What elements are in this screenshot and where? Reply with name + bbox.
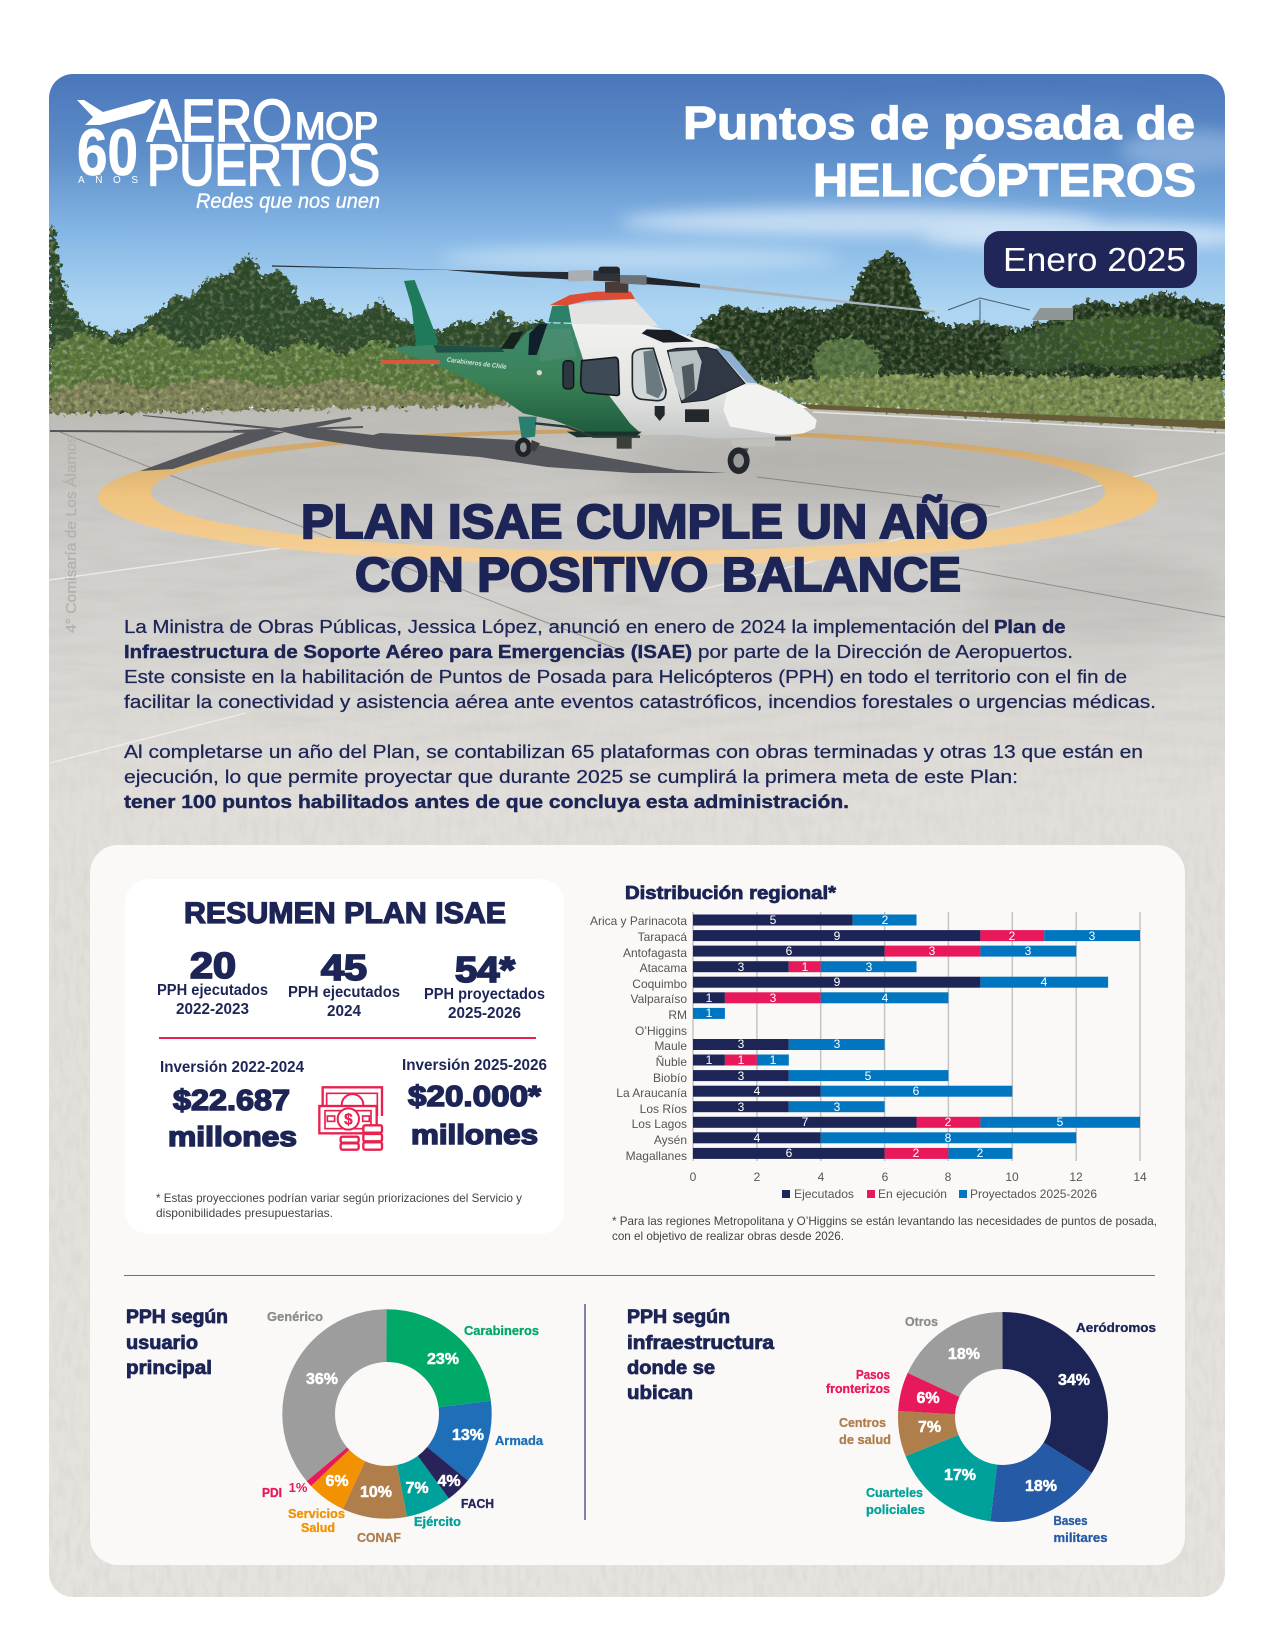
donut chart xyxy=(926,1340,1080,1494)
donut values: 6% xyxy=(916,1390,940,1407)
donut values: 17% xyxy=(944,1467,976,1484)
intro text: facilitar la conectividad y asistencia aérea ante eventos catastróficos, incendios forestales o urgencias médicas. xyxy=(124,691,1156,712)
inversión 2025-2026: Inversión 2025-2026 xyxy=(402,1057,547,1074)
footnote xyxy=(156,1191,522,1220)
stat 45: PPH ejecutados xyxy=(288,984,400,1001)
ground concrete xyxy=(49,403,1230,1597)
x axis: 12 xyxy=(1069,1170,1083,1184)
heading: donde se xyxy=(627,1358,715,1379)
donut labels: de salud xyxy=(839,1433,891,1447)
bar values: 5 xyxy=(1057,1115,1064,1129)
donut labels: CONAF xyxy=(357,1531,401,1545)
donut labels: Pasos xyxy=(856,1368,890,1382)
header title: Puntos de posada de xyxy=(683,97,1195,149)
donut labels: Aeródromos xyxy=(1076,1321,1156,1335)
donut labels: Bases xyxy=(1054,1514,1088,1528)
intro text: Plan de xyxy=(994,616,1066,637)
logo PUERTOS: PUERTOS xyxy=(147,133,380,198)
photo credit: 4° Comisaría de Los Álamos xyxy=(63,435,80,633)
icon: money: $ xyxy=(344,1112,353,1129)
años: AÑOS xyxy=(78,173,138,186)
bar chart: distribución regional xyxy=(590,882,1157,1243)
heading: ubican xyxy=(627,1383,693,1404)
stat 54: 2025-2026 xyxy=(448,1005,521,1022)
bar values: 3 xyxy=(834,1037,841,1051)
stat 45: 2024 xyxy=(327,1003,361,1020)
tail fin xyxy=(404,280,438,350)
bar values: 8 xyxy=(945,1131,952,1145)
bar values: 3 xyxy=(770,991,777,1005)
bar values: 2 xyxy=(882,913,889,927)
donut labels: Cuarteles xyxy=(866,1486,923,1500)
inversión 2025-2026 xyxy=(402,1057,547,1150)
intro text: ejecución, lo que permite proyectar que durante 2025 se cumplirá la primera meta de este Plan: xyxy=(124,766,1018,787)
heading xyxy=(126,1307,228,1379)
donut values xyxy=(289,1351,484,1501)
x axis: 14 xyxy=(1133,1170,1147,1184)
donut labels: Centros xyxy=(839,1416,886,1430)
stat 45: 45 xyxy=(321,947,367,988)
donut values: 6% xyxy=(325,1473,349,1490)
region labels: Antofagasta xyxy=(623,946,687,960)
bar values: 4 xyxy=(754,1131,761,1145)
intro text: por parte de la Dirección de Aeropuertos. xyxy=(698,641,1073,662)
donut values: 18% xyxy=(948,1346,980,1363)
bar values: 3 xyxy=(929,944,936,958)
legend: En ejecución xyxy=(878,1187,947,1201)
bar values: 4 xyxy=(754,1084,761,1098)
donut labels: policiales xyxy=(866,1503,925,1517)
stat 20 xyxy=(157,945,268,1018)
region labels: Coquimbo xyxy=(632,977,687,991)
bar values: 6 xyxy=(786,944,793,958)
donut labels: militares xyxy=(1054,1531,1108,1545)
icon: airplane xyxy=(77,99,156,125)
region labels xyxy=(590,914,687,1163)
heading: PPH según xyxy=(627,1307,730,1328)
bars xyxy=(693,914,1140,1159)
x axis: 2 xyxy=(754,1170,761,1184)
white body xyxy=(572,324,817,438)
region labels: Los Ríos xyxy=(640,1102,687,1116)
bar values: 1 xyxy=(706,1053,713,1067)
x axis: 10 xyxy=(1005,1170,1019,1184)
donut values: 7% xyxy=(918,1419,941,1436)
region labels: Aysén xyxy=(654,1133,687,1147)
bar values: 3 xyxy=(738,1100,745,1114)
legend: Proyectados 2025-2026 xyxy=(970,1187,1097,1201)
bar values: 1 xyxy=(802,960,809,974)
donut labels: Carabineros xyxy=(464,1324,539,1338)
bar values xyxy=(706,913,1096,1160)
bar values: 2 xyxy=(945,1115,952,1129)
stat 20: 20 xyxy=(190,945,236,986)
donut values: 1% xyxy=(289,1480,308,1495)
section: PPH según usuario principal xyxy=(126,1307,544,1545)
date badge: Enero 2025 xyxy=(1003,242,1186,279)
header title xyxy=(683,97,1196,206)
region labels: Arica y Parinacota xyxy=(590,914,687,928)
inversión 2022-2024: Inversión 2022-2024 xyxy=(160,1059,304,1076)
footnote: * Estas proyecciones podrían variar según priorizaciones del Servicio y xyxy=(156,1191,522,1205)
legend xyxy=(782,1187,1097,1201)
region labels: Los Lagos xyxy=(632,1117,687,1131)
heading: infraestructura xyxy=(627,1333,774,1354)
chart footnote xyxy=(612,1214,1157,1243)
region labels: RM xyxy=(668,1008,687,1022)
helicopter shadow xyxy=(50,415,727,473)
header title: HELICÓPTEROS xyxy=(813,154,1196,206)
inversión 2022-2024: millones xyxy=(168,1121,297,1152)
x axis: 6 xyxy=(882,1170,889,1184)
bar values: 3 xyxy=(738,1069,745,1083)
main title: PLAN ISAE CUMPLE UN AÑO xyxy=(301,494,988,549)
donut values: 13% xyxy=(452,1427,484,1444)
donut chart xyxy=(309,1336,465,1492)
logo MOP: MOP xyxy=(295,106,378,148)
bar values: 5 xyxy=(770,913,777,927)
stabilizer xyxy=(382,360,440,364)
bar values: 3 xyxy=(738,1037,745,1051)
donut labels: Servicios xyxy=(288,1507,345,1521)
stat 54: PPH proyectados xyxy=(424,986,545,1003)
date badge xyxy=(984,231,1197,288)
intro text: Este consiste en la habilitación de Puntos de Posada para Helicópteros (PPH) en todo el territorio con el fin de xyxy=(124,666,1127,687)
region labels: Atacama xyxy=(640,961,687,975)
cowling xyxy=(548,305,572,323)
main title xyxy=(301,494,988,602)
footnote: disponibilidades presupuestarias. xyxy=(156,1206,333,1220)
donut values xyxy=(916,1346,1090,1495)
heading: PPH según xyxy=(126,1307,228,1328)
trees left xyxy=(49,228,600,414)
rotor xyxy=(272,265,568,279)
inversión 2025-2026: millones xyxy=(411,1119,538,1150)
x axis xyxy=(690,1170,1147,1184)
intro text xyxy=(124,616,1156,812)
region labels: Magallanes xyxy=(626,1149,687,1163)
bar values: 6 xyxy=(913,1084,920,1098)
logo: Aeropuertos MOP 60 años xyxy=(77,88,380,213)
bar values: 5 xyxy=(865,1069,872,1083)
bar values: 1 xyxy=(770,1053,777,1067)
heading xyxy=(627,1307,774,1404)
logo AERO: AERO xyxy=(147,88,292,154)
donut labels: FACH xyxy=(461,1497,494,1511)
helicopter xyxy=(272,265,935,474)
main title: CON POSITIVO BALANCE xyxy=(355,549,961,602)
region labels: Valparaíso xyxy=(631,992,687,1006)
x axis: 8 xyxy=(945,1170,952,1184)
donut labels: fronterizos xyxy=(826,1382,890,1396)
donut values: 36% xyxy=(306,1371,338,1388)
heading: RESUMEN PLAN ISAE xyxy=(184,897,506,930)
region labels: Tarapacá xyxy=(638,930,687,944)
bar values: 1 xyxy=(738,1053,745,1067)
yellow helipad ring xyxy=(98,429,1158,565)
donut labels: Ejército xyxy=(414,1515,461,1529)
panel: resumen plan ISAE xyxy=(125,879,564,1234)
logo tagline: Redes que nos unen xyxy=(196,190,380,213)
donut values: 7% xyxy=(405,1480,429,1497)
intro text: Infraestructura de Soporte Aéreo para Emergencias (ISAE) xyxy=(124,641,692,662)
panel: data section xyxy=(90,845,1185,1565)
chart title: Distribución regional* xyxy=(625,882,837,903)
bar values: 1 xyxy=(706,1006,713,1020)
donut labels: PDI xyxy=(262,1486,282,1500)
belly and landing gear xyxy=(567,432,642,437)
region labels: Maule xyxy=(654,1039,687,1053)
fuselage green xyxy=(395,323,640,433)
stat 20: PPH ejecutados xyxy=(157,982,268,999)
region labels: La Araucanía xyxy=(616,1086,687,1100)
windows xyxy=(642,329,694,343)
bar values: 3 xyxy=(834,1100,841,1114)
bar values: 3 xyxy=(866,960,873,974)
bar values: 2 xyxy=(977,1146,984,1160)
inversión 2022-2024 xyxy=(160,1059,304,1152)
bar values: 1 xyxy=(706,991,713,1005)
donut labels xyxy=(262,1310,544,1545)
donut values: 23% xyxy=(427,1351,459,1368)
heading: principal xyxy=(126,1358,212,1379)
stat 54 xyxy=(424,949,545,1022)
region labels: Biobío xyxy=(653,1071,687,1085)
trees right xyxy=(690,252,1225,429)
stat 45 xyxy=(288,947,400,1020)
number 60: 60 xyxy=(77,115,138,189)
donut labels: Genérico xyxy=(267,1310,323,1324)
intro text: La Ministra de Obras Públicas, Jessica López, anunció en enero de 2024 la implementación del xyxy=(124,616,989,637)
chart footnote: * Para las regiones Metropolitana y O’Higgins se están levantando las necesidades de puntos de posada, xyxy=(612,1214,1157,1228)
heading: usuario xyxy=(126,1333,198,1354)
inversión 2022-2024: $22.687 xyxy=(173,1085,290,1117)
intro text: tener 100 puntos habilitados antes de que concluya esta administración. xyxy=(124,791,849,812)
bar values: 6 xyxy=(786,1146,793,1160)
intro text: Al completarse un año del Plan, se contabilizan 65 plataformas con obras terminadas y otras 13 que están en xyxy=(124,741,1143,762)
donut values: 4% xyxy=(437,1473,461,1490)
sky xyxy=(49,74,1260,404)
donut labels xyxy=(826,1315,1156,1545)
stat 54: 54* xyxy=(455,949,515,990)
bar values: 3 xyxy=(1025,944,1032,958)
region labels: Ñuble xyxy=(656,1055,687,1069)
donut values: 10% xyxy=(360,1484,392,1501)
region labels: O’Higgins xyxy=(635,1024,687,1038)
bar values: 7 xyxy=(802,1115,809,1129)
bar values: 9 xyxy=(834,975,841,989)
donut values: 34% xyxy=(1058,1372,1090,1389)
bar values: 4 xyxy=(1041,975,1048,989)
donut labels: Otros xyxy=(905,1315,938,1329)
donut values: 18% xyxy=(1025,1478,1057,1495)
bar values: 4 xyxy=(882,991,889,1005)
legend: Ejecutados xyxy=(794,1187,854,1201)
bar values: 3 xyxy=(738,960,745,974)
x axis: 0 xyxy=(690,1170,697,1184)
stat 20: 2022-2023 xyxy=(176,1001,249,1018)
bar values: 3 xyxy=(1089,929,1096,943)
chart footnote: con el objetivo de realizar obras desde 2026. xyxy=(612,1229,844,1243)
donut labels: Salud xyxy=(301,1521,335,1535)
donut labels: Armada xyxy=(495,1434,544,1448)
x axis: 4 xyxy=(818,1170,825,1184)
fuselage lettering: Carabineros de Chile xyxy=(446,357,507,371)
inversión 2025-2026: $20.000* xyxy=(408,1081,542,1113)
bar values: 9 xyxy=(834,929,841,943)
icon: money xyxy=(319,1087,382,1150)
section: PPH según infraestructura xyxy=(627,1307,1156,1545)
bar values: 2 xyxy=(913,1146,920,1160)
bar values: 2 xyxy=(1009,929,1016,943)
